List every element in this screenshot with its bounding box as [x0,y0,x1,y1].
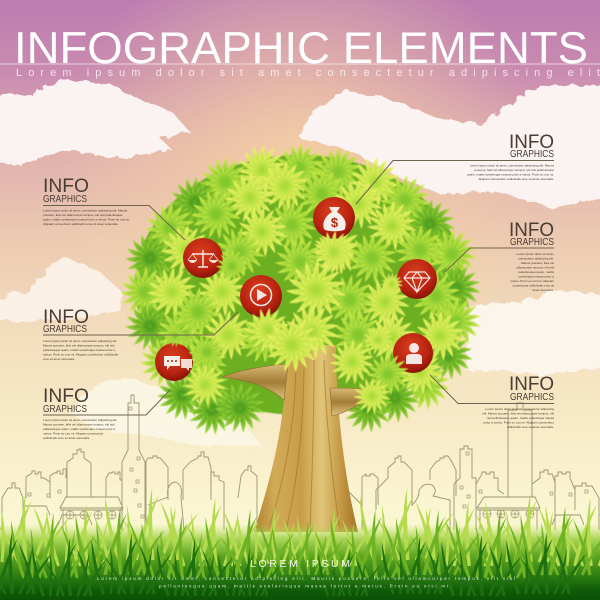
callout: scales: posuere, felis vel ullamcorper tempus, elit nisl pellentesque [43,213,123,217]
callout: money: quam, mattis scelerisque massa tortor a metus. Proin eu orci mi. [467,172,554,176]
city skyline right [349,403,599,530]
callout: play [43,306,238,361]
clouds [0,80,600,446]
callout: diamond: consectetur sollicitudin eros sit [513,284,554,288]
callout: diamond: amet venenatis. [532,288,554,292]
callout: play: eros sit amet venenatis. [43,357,75,361]
grass [0,488,600,600]
tree crown back foliage [119,142,482,436]
callout: play: Lorem ipsum dolor sit amet, consectetur adipiscing elit. [43,339,117,343]
city skyline left [2,395,257,530]
callout: play: metus. Proin eu orci mi. Aliquam consectetur sollicitudin [43,352,118,356]
callout: person [430,373,554,429]
callout: money [356,131,554,204]
callout: person: Lorem ipsum dolor sit amet, consectetur adipiscing [485,407,554,411]
icon: money bag [313,197,355,239]
windows left [28,407,144,518]
callout: person: tortor a metus. Proin eu orci mi. Aliquam consectetur [483,420,554,424]
icon: diamond [397,259,437,299]
house left [60,497,123,530]
callout: play: GRAPHICS [43,324,87,335]
callout: diamond: GRAPHICS [510,237,554,248]
callout: scales: INFO [43,175,89,197]
callout: diamond: pellentesque quam, mattis [518,270,554,274]
callout: scales: quam, mattis scelerisque massa tortor a metus. Proin eu orci mi. [43,218,130,222]
footer text [97,576,515,588]
tree crown front foliage [163,230,410,415]
callout: diamond: ullamcorper tempus, elit nisl [516,266,554,270]
callout: play: Mauris posuere, felis vel ullamcorper tempus, elit nisl [43,344,115,348]
callout: diamond: INFO [509,219,554,241]
tree crown middle foliage [146,160,466,395]
callout: chat: pellentesque quam, mattis scelerisque massa tortor a [43,427,115,431]
callout: money: INFO [509,131,554,153]
callout: chat: metus. Proin eu orci mi. Aliquam consectetur [43,432,103,436]
callout: diamond: metus. Proin eu orci mi. Aliquam [510,279,554,283]
callout: chat: Mauris posuere, felis vel ullamcorper tempus, elit nisl [43,422,115,426]
callout: scales: Aliquam consectetur sollicitudin eros sit amet venenatis. [43,222,119,226]
callout: chat: sollicitudin eros sit amet venenatis. [43,436,90,440]
callout: chat [43,385,170,440]
icon: money bag: $ [331,215,339,230]
house right [477,497,540,530]
callout: scales: Lorem ipsum dolor sit amet, consectetur adipiscing elit. Mauris [43,208,128,212]
callout: scales: GRAPHICS [43,194,87,205]
windows right [460,452,588,508]
title: INFOGRAPHIC ELEMENTS [14,24,588,73]
callout: person: elit. Mauris posuere, felis vel ullamcorper tempus, elit [482,412,554,416]
icon: chat [155,343,193,381]
callout: diamond: scelerisque massa tortor a [518,274,554,278]
callout: scales [43,175,185,240]
subtitle: Lorem ipsum dolor sit amet consectetur adipiscing elit [16,67,600,79]
callout: diamond [445,219,554,292]
icon: play button [240,275,282,317]
callout: person: nisl pellentesque quam, mattis scelerisque massa [487,416,554,420]
callout: diamond: Lorem ipsum dolor sit amet, [516,252,554,256]
icon: person [393,333,433,373]
callout: play: pellentesque quam, mattis scelerisque massa tortor a [43,348,115,352]
callout: money: posuere, felis vel ullamcorper tempus, elit nisl pellentesque [474,168,554,172]
callout: person: sollicitudin eros sit amet venenatis. [507,425,554,429]
footer text: pellentesque quam, mattis scelerisque massa tortor a metus. Proin eu orci mi. [159,584,451,588]
footer text: Lorem ipsum dolor sit amet, consectetur adipiscing elit. Mauris posuere, felis vel ullamcorper tempus, elit nisl [97,576,515,581]
callout: play: INFO [43,306,89,328]
callout: diamond: Mauris posuere, felis vel [521,261,554,265]
callout: person: GRAPHICS [510,392,554,403]
footer heading: LOREM IPSUM [250,558,350,570]
callout: chat: Lorem ipsum dolor sit amet, consectetur adipiscing elit. [43,418,117,422]
callout: chat: GRAPHICS [43,404,87,415]
icon: scales [183,238,223,278]
callout: diamond: consectetur adipiscing elit. [518,256,554,260]
callout: person: INFO [509,373,554,395]
tree trunk [222,345,376,532]
callout: money: Aliquam consectetur sollicitudin eros sit amet venenatis. [478,177,554,181]
callout: chat: INFO [43,385,89,407]
left branch [222,364,288,400]
callout: money: GRAPHICS [510,149,554,160]
callout: money: Lorem ipsum dolor sit amet, consectetur adipiscing elit. Mauris [470,164,554,168]
right branch [330,388,376,416]
